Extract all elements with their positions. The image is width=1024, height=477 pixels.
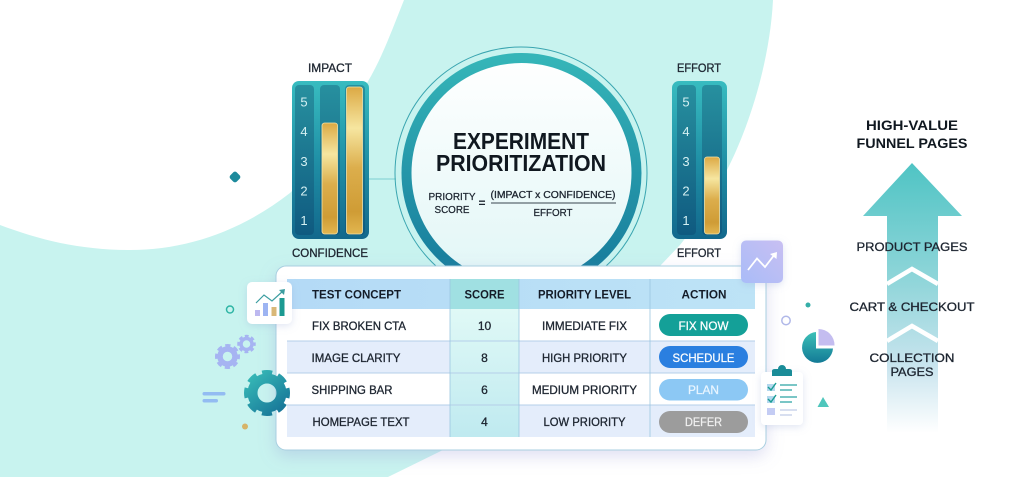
row: homepage text: 4 — [481, 415, 488, 429]
row: image clarity: SCHEDULE — [672, 351, 734, 365]
row: fix broken cta — [312, 314, 748, 336]
row: fix broken cta: FIX BROKEN CTA — [312, 319, 406, 333]
gold bar: confidence — [322, 123, 338, 234]
row: image clarity — [312, 346, 748, 368]
title: PRIORITIZATION — [436, 150, 606, 176]
icon: speed lines — [202, 392, 226, 402]
row: fix broken cta: 10 — [478, 319, 491, 333]
row: image clarity: IMAGE CLARITY — [312, 351, 400, 365]
table header: ACTION — [682, 288, 726, 302]
label: collection pages: PAGES — [890, 365, 934, 379]
panel: impact and confidence bars: 1 — [300, 213, 308, 228]
background blob — [0, 0, 773, 477]
decorative ring: lavender — [782, 316, 790, 325]
panel: effort bar: 3 — [682, 154, 690, 169]
gold bar: impact — [346, 87, 362, 234]
panel: impact and confidence bars: 3 — [300, 154, 308, 169]
title — [436, 128, 606, 176]
gold bar: effort — [704, 157, 720, 234]
icon: large gear — [246, 372, 288, 414]
panel: impact and confidence bars: 5 — [300, 94, 308, 110]
icon: trend tile — [741, 240, 783, 283]
formula: = — [478, 196, 486, 210]
table rows background — [287, 279, 755, 437]
row: homepage text: DEFER — [685, 415, 722, 429]
title: EXPERIMENT — [453, 128, 589, 154]
decorative dot: gold — [242, 424, 248, 430]
label: effort bottom: EFFORT — [677, 246, 722, 260]
row: homepage text: HOMEPAGE TEXT — [312, 415, 410, 429]
decorative ring: teal — [226, 306, 234, 313]
row: shipping bar — [312, 379, 748, 400]
panel: effort bar: 4 — [682, 124, 690, 139]
panel: table card — [276, 266, 766, 450]
formula — [428, 189, 616, 219]
panel: effort bar — [672, 81, 727, 239]
heading: high-value funnel pages: HIGH-VALUE — [866, 117, 958, 133]
row: shipping bar: PLAN — [688, 383, 719, 397]
heading: high-value funnel pages: FUNNEL PAGES — [856, 135, 968, 151]
row: homepage text — [312, 411, 748, 433]
label: cart and checkout: CART & CHECKOUT — [850, 300, 975, 314]
panel: effort bar: 1 — [682, 213, 690, 228]
formula: EFFORT — [534, 207, 573, 219]
arrow: funnel — [863, 163, 962, 433]
decorative triangle — [818, 397, 829, 407]
row: fix broken cta: FIX NOW — [678, 319, 729, 333]
connector line — [369, 178, 396, 180]
icon: pie chart — [802, 329, 835, 363]
icon: clipboard — [761, 365, 803, 425]
formula: (IMPACT x CONFIDENCE) — [490, 189, 616, 201]
panel: impact and confidence bars: 4 — [300, 124, 308, 139]
label: collection pages: COLLECTION — [870, 351, 954, 365]
row: image clarity: HIGH PRIORITY — [542, 351, 627, 365]
row: shipping bar: SHIPPING BAR — [312, 383, 393, 397]
panel: effort bar: 2 — [682, 184, 690, 198]
icon: medium gear — [216, 346, 238, 368]
row: homepage text: LOW PRIORITY — [544, 415, 626, 429]
label: confidence: CONFIDENCE — [292, 246, 368, 260]
row: fix broken cta: IMMEDIATE FIX — [542, 319, 627, 333]
chevron divider — [887, 269, 938, 284]
row: shipping bar: 6 — [481, 383, 488, 397]
panel: effort bar: 5 — [682, 94, 690, 110]
icon: chart card — [247, 282, 292, 324]
decorative dot: diamond — [229, 171, 241, 183]
chevron divider — [887, 326, 938, 341]
table header: TEST CONCEPT — [312, 288, 402, 302]
icon: small gear — [238, 336, 254, 352]
panel: impact and confidence bars — [292, 81, 369, 239]
formula: PRIORITY — [428, 191, 476, 203]
panel: impact and confidence bars: 2 — [300, 184, 308, 198]
label: effort top: EFFORT — [677, 61, 722, 75]
row: image clarity: 8 — [481, 351, 488, 365]
label: impact: IMPACT — [308, 61, 353, 75]
decorative dot: teal — [806, 302, 810, 308]
central circle — [395, 47, 647, 299]
table header — [287, 279, 755, 309]
formula: SCORE — [434, 204, 470, 216]
table header: SCORE — [464, 288, 504, 302]
label: product pages: PRODUCT PAGES — [856, 240, 968, 254]
heading: high-value funnel pages — [856, 117, 968, 151]
row: shipping bar: MEDIUM PRIORITY — [532, 383, 637, 397]
label: collection pages — [870, 351, 954, 379]
table header: PRIORITY LEVEL — [538, 288, 631, 302]
